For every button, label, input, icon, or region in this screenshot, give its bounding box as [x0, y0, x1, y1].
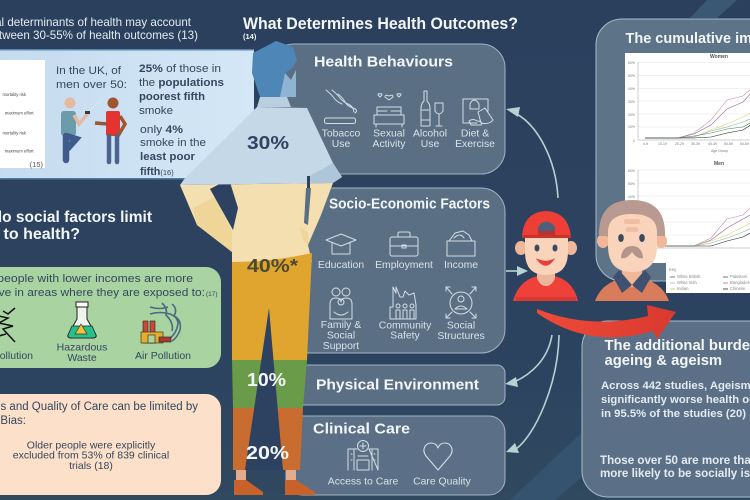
panel: lower incomes exposure [0, 267, 221, 368]
panel: smoking inequality [0, 49, 254, 180]
figure section: right arm gap [304, 188, 311, 225]
figure: person divided by percentage [180, 41, 342, 495]
labels: Use [332, 139, 350, 150]
figure section: face [280, 70, 296, 97]
chart: men: 60% [628, 169, 635, 173]
chart: women: Women [710, 54, 728, 60]
smoking statistics [139, 63, 224, 178]
panel: cumulative impact [513, 19, 750, 497]
icon: alcohol [421, 91, 443, 126]
chart: women: 0-9 [643, 142, 648, 146]
UK heading [56, 65, 127, 91]
arrow: to physical environment [505, 335, 552, 387]
ageism study text: in 95.5% of the studies (20) [601, 408, 746, 420]
icon: young person with red cap [513, 211, 578, 301]
percent 40: 40%* [247, 256, 298, 276]
percent 30: 30% [247, 133, 289, 153]
heading: ageing & ageism [604, 353, 722, 369]
icon: hazardous waste flask [68, 302, 96, 338]
line charts [625, 53, 750, 293]
figure section: shirt 30 percent [180, 107, 342, 185]
main title: (14) [243, 32, 257, 41]
panel: ageing and ageism [582, 321, 750, 497]
panel: quality of care bias: excluded from 53% of 839 clinical [13, 450, 169, 462]
chart: men: Men [714, 161, 724, 167]
icon: diet [463, 99, 493, 125]
icon: bed [374, 94, 404, 127]
figure section: left arm gap [210, 179, 238, 230]
chart: men: 40% [628, 195, 635, 199]
education labels [318, 260, 478, 271]
isolation text [600, 454, 750, 480]
education labels: Income [444, 260, 478, 271]
icon: heart [424, 443, 452, 470]
lower labels: Community [379, 320, 432, 332]
figure section: neck [257, 97, 291, 107]
heading: Socio-Economic Factors [329, 196, 490, 212]
labels: Tobacco [322, 128, 361, 140]
chart thumbnail: (15) [30, 160, 43, 169]
smoking statistics: only 4% [140, 124, 183, 136]
smoking statistics: poorest fifth [139, 91, 205, 103]
smoking statistics: smoke in the [140, 137, 206, 149]
heading: Clinical Care [313, 420, 410, 438]
labels: Use [421, 139, 439, 150]
chart: women: 60-69 [740, 142, 749, 146]
main title: What Determines Health Outcomes? [243, 15, 518, 33]
icon: older person [595, 200, 669, 301]
chart: women: 40% [628, 87, 635, 91]
lower labels: Structures [437, 331, 485, 342]
education labels: Education [318, 260, 364, 271]
percent 20: 20% [246, 443, 289, 463]
heading: social factors [0, 209, 152, 243]
panel: health behaviours [270, 44, 505, 174]
heading: Health Behaviours [314, 54, 453, 70]
panel: clinical care [286, 416, 505, 495]
chart thumbnail: maximum effort [5, 110, 34, 116]
icon: employment [390, 232, 418, 256]
arrow: to clinical care [506, 335, 559, 453]
figure section: arms and chest [180, 183, 333, 264]
labels: Alcohol [413, 128, 447, 140]
icon: tobacco [324, 90, 357, 124]
chart legend [666, 263, 750, 293]
chart legend: Pakistani [730, 274, 747, 279]
panel: quality of care bias [0, 394, 221, 495]
icon: air pollution factory [141, 303, 180, 343]
figure section: leg gap [245, 308, 283, 470]
label: hazardous waste: Hazardous [57, 342, 107, 354]
labels: Activity [373, 139, 406, 150]
chart legend: Indian [677, 286, 689, 291]
chart: women [628, 54, 750, 153]
labels: Care Quality [413, 476, 472, 488]
arrow: to health behaviours [506, 107, 558, 198]
smoking statistics: 25% of those in [139, 63, 221, 75]
chart legend: Key [669, 267, 677, 272]
lower labels: Social [327, 330, 355, 342]
chart legend: White Irish [677, 280, 697, 285]
panel: physical environment: Physical Environment [316, 376, 479, 394]
chart legend: White British [677, 274, 701, 279]
icon: community [390, 287, 416, 319]
main title [243, 15, 518, 41]
labels [328, 476, 472, 488]
labels: Diet & [461, 128, 489, 140]
panel: physical environment [290, 365, 505, 405]
chart thumbnail: mortality risk [2, 92, 27, 97]
panel: quality of care bias: Older people were explicitly [27, 440, 156, 452]
icon: noise pollution [0, 308, 15, 342]
chart: women: 50% [628, 74, 635, 78]
chart: women: 30-39 [691, 142, 700, 146]
intro text [0, 16, 198, 42]
smoking statistics: least poor [140, 151, 196, 163]
label: hazardous waste [57, 342, 107, 364]
chart legend: Chinese [730, 286, 746, 291]
chart: men: 30% [628, 208, 635, 212]
lower labels: Support [323, 341, 359, 352]
chart: women: 60% [628, 61, 635, 65]
chart: women: 20% [628, 113, 635, 117]
big red arrow [537, 305, 676, 339]
heading [604, 338, 750, 369]
icon: two men smoking [61, 98, 125, 162]
figure section: feet [236, 470, 246, 482]
lower labels: Family & [321, 320, 361, 331]
chart: women: 20-29 [675, 142, 684, 146]
icon: wallet [447, 231, 475, 256]
ageism study text [601, 380, 750, 420]
chart: women: 40-49 [708, 142, 717, 146]
chart: men [628, 161, 750, 248]
chart: women: 10% [628, 125, 635, 129]
panel: quality of care bias: trials (18) [69, 460, 113, 472]
icon: hospital [348, 440, 378, 470]
chart thumbnail: mortality risk [2, 130, 27, 136]
chart: women: 0 [633, 139, 635, 143]
percent 10: 10% [247, 370, 286, 390]
icon: social structures [446, 287, 476, 318]
labels [322, 128, 495, 150]
figure section: trousers 10 percent [232, 360, 307, 408]
smoking statistics: smoke [139, 105, 173, 117]
figure section: trousers 20 percent [233, 408, 303, 470]
figure section: trousers 40 percent [232, 253, 312, 360]
chart thumbnail: maximum effort [5, 148, 34, 154]
labels: Exercise [455, 139, 495, 150]
chart: women: 10-19 [658, 142, 667, 146]
figure section: head [252, 41, 297, 97]
panel: socio-economic factors [270, 188, 505, 353]
chart: women: 30% [628, 100, 635, 104]
label: hazardous waste: Waste [67, 352, 97, 364]
arrow: socio-economic link [506, 266, 528, 276]
lower labels: Safety [390, 330, 421, 342]
UK heading: men over 50: [56, 79, 127, 91]
label: air pollution: Air Pollution [135, 350, 191, 362]
chart: women: 50-59 [724, 142, 733, 146]
labels: Access to Care [328, 476, 398, 488]
icon: family [330, 288, 352, 319]
chart: men: 50% [628, 182, 635, 186]
chart thumbnail [0, 60, 45, 169]
lower labels [321, 320, 485, 352]
labels: Sexual [373, 128, 405, 140]
chart: women: Age Group [711, 149, 728, 153]
smoking statistics: the populations [139, 77, 224, 89]
lower labels: Social [447, 320, 475, 332]
smoking statistics: fifth(16) [140, 166, 174, 178]
UK heading: In the UK, of [56, 65, 122, 77]
panel: lower incomes exposure: (17) [206, 291, 218, 298]
education labels: Employment [375, 260, 433, 271]
icon: education [326, 234, 356, 254]
